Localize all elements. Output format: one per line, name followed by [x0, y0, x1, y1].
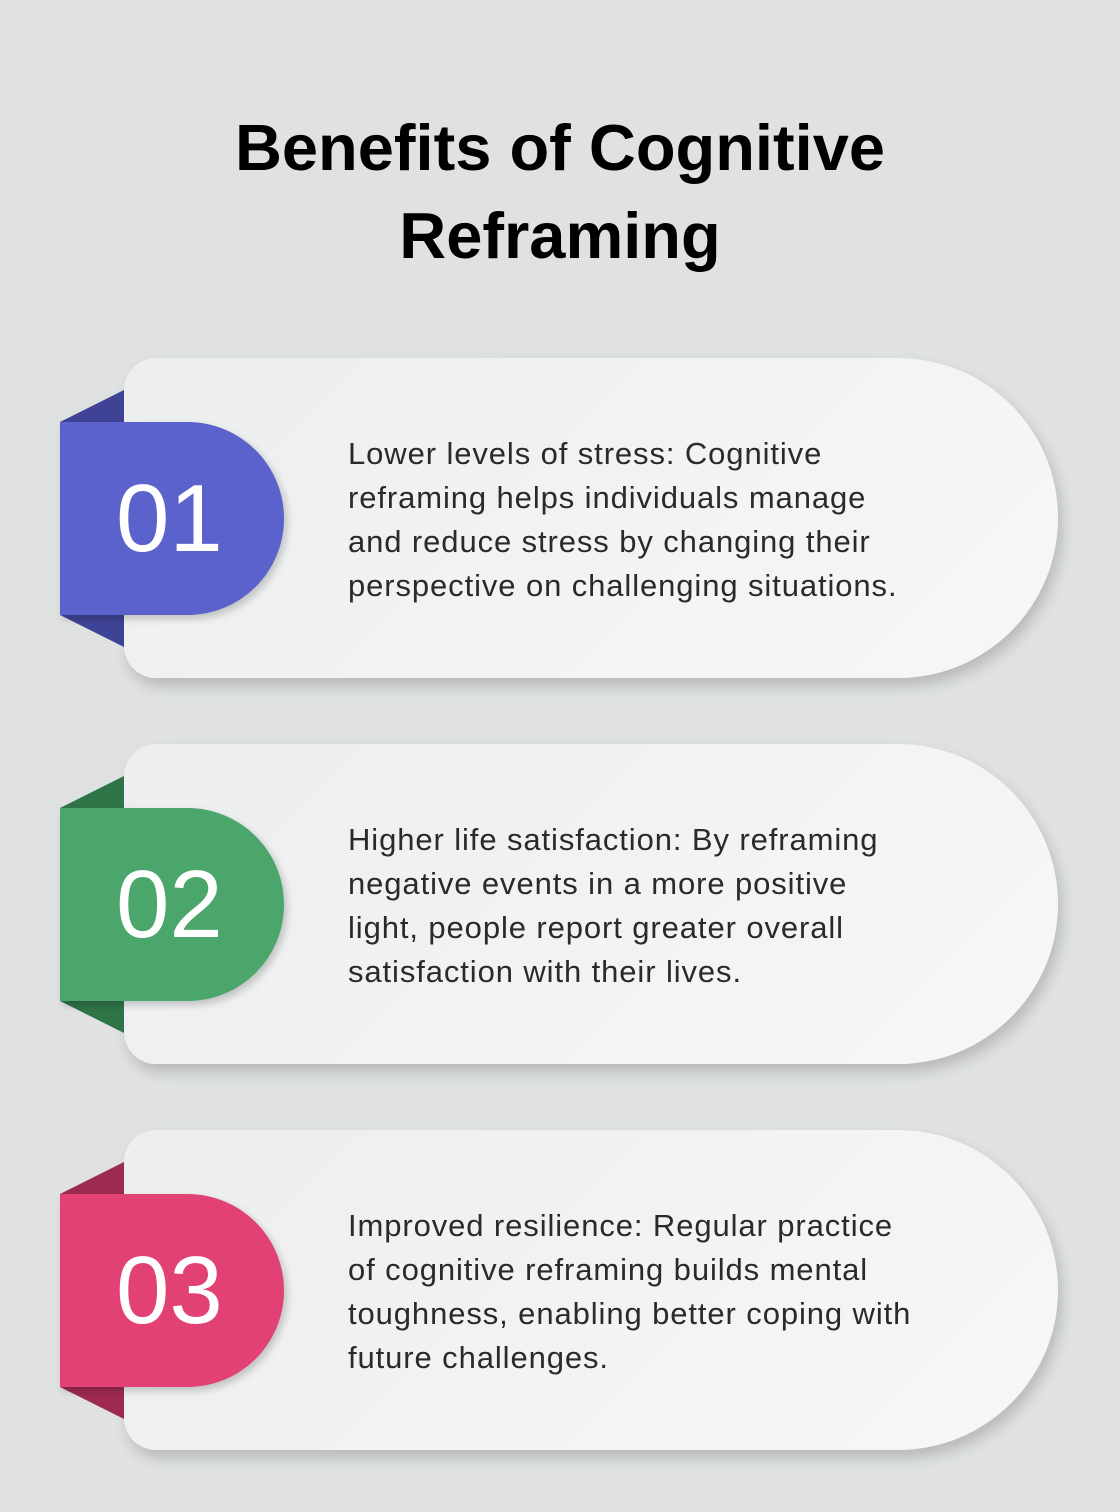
tab 03: 03 [116, 1237, 223, 1344]
tab 02: 02 [116, 851, 223, 958]
text 2 [348, 822, 878, 989]
text 2: satisfaction with their lives. [348, 954, 742, 989]
text 1: and reduce stress by changing their [348, 524, 871, 559]
fold 3 [60, 1162, 124, 1419]
text 3 [348, 1208, 911, 1375]
text 2: light, people report greater overall [348, 910, 844, 945]
text 3: future challenges. [348, 1340, 609, 1375]
text 3: of cognitive reframing builds mental [348, 1252, 868, 1287]
fold 2 [60, 776, 124, 1033]
tab 01: 01 [116, 465, 223, 572]
fold 1 [60, 390, 124, 647]
tab 01 [60, 422, 284, 615]
text 1: reframing helps individuals manage [348, 480, 866, 515]
text 1: Lower levels of stress: Cognitive [348, 436, 822, 471]
text 3: Improved resilience: Regular practice [348, 1208, 893, 1243]
card 3 [124, 1130, 1058, 1450]
text 1 [348, 436, 897, 603]
text 3: toughness, enabling better coping with [348, 1296, 911, 1331]
card 2 [124, 744, 1058, 1064]
item 2 [60, 744, 1068, 1078]
title: Benefits of Cognitive [235, 111, 885, 184]
text 2: Higher life satisfaction: By reframing [348, 822, 878, 857]
tab 03 [60, 1194, 284, 1387]
title [235, 111, 885, 272]
card 1 [124, 358, 1058, 678]
title: Reframing [399, 199, 721, 272]
item 3 [60, 1130, 1068, 1464]
tab 02 [60, 808, 284, 1001]
text 1: perspective on challenging situations. [348, 568, 897, 603]
item 1 [60, 358, 1068, 692]
text 2: negative events in a more positive [348, 866, 847, 901]
